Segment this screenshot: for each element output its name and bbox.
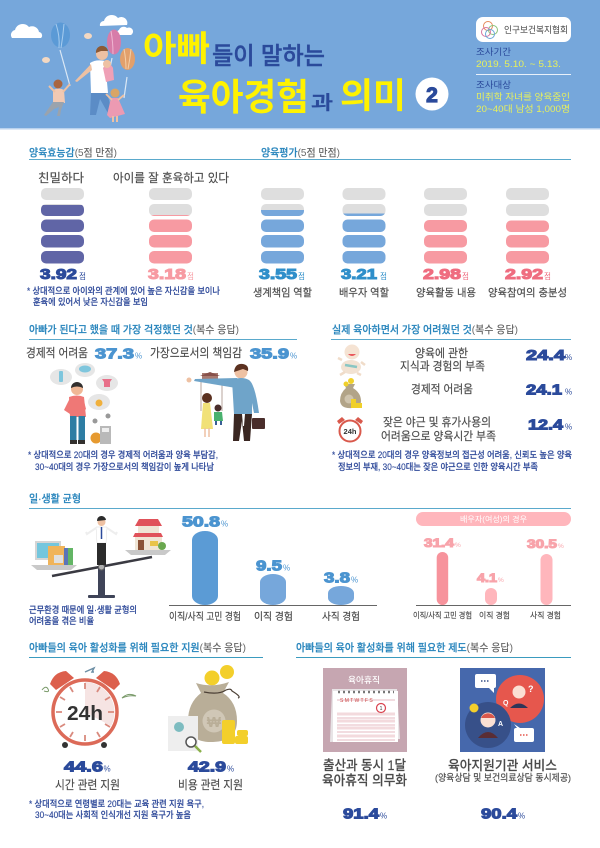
bar labels: 양육참여의 충분성 bbox=[488, 287, 567, 299]
value: 30.5% bbox=[527, 537, 564, 551]
note: support: 30~40대는 사회적 인식개선 지원 욕구가 높음 bbox=[35, 809, 191, 820]
value: 30.5%: 30.5 bbox=[527, 537, 557, 551]
stat: 91.4% bbox=[343, 806, 387, 822]
note: worries: * 상대적으로 20대의 경우 경제적 어려움과 양육 부담감, bbox=[28, 449, 218, 460]
survey info bbox=[476, 47, 571, 114]
row text: overtime: 잦은 야근 및 휴가사용의 bbox=[383, 416, 491, 429]
value: 9.5%: % bbox=[283, 564, 290, 572]
issue number badge bbox=[416, 78, 448, 110]
survey info: 조사기간 bbox=[476, 47, 511, 57]
note: efficacy bbox=[27, 285, 221, 307]
bar: activities 2.98 bbox=[424, 188, 467, 264]
value: 2.98: 2.98 bbox=[423, 266, 461, 283]
value: 2.98 bbox=[423, 266, 469, 283]
bar chart: fathers bbox=[169, 514, 377, 623]
value: 50.8%: 50.8 bbox=[182, 514, 220, 530]
heading: parenting evaluation: 양육평가(5점 만점) bbox=[261, 146, 340, 159]
pill label: spouse bbox=[416, 512, 571, 526]
note: support: * 상대적으로 연령별로 20대는 교육 관련 지원 욕구, bbox=[29, 798, 204, 809]
stat: head of household 35.9%: % bbox=[290, 352, 297, 360]
icon: money bag large: ₩ bbox=[207, 714, 222, 731]
stat: cost 42.9%: 42.9 bbox=[188, 758, 226, 776]
stat: 91.4%: % bbox=[380, 812, 387, 820]
value: 24.1%: 24.1 bbox=[526, 382, 562, 398]
row text: knowledge: 양육에 관한 bbox=[415, 347, 468, 360]
icon: alarm clock bbox=[337, 417, 363, 442]
heading: needed support: 아빠들의 육아 활성화를 위해 필요한 지원(복수 응답) bbox=[29, 641, 246, 654]
value: 3.8% bbox=[324, 570, 358, 586]
illustration: father with family bbox=[186, 364, 265, 441]
row text: economic: 경제적 어려움 bbox=[411, 382, 473, 396]
icon: consulting service: Q bbox=[503, 700, 509, 707]
axis labels: spouse bbox=[413, 610, 561, 620]
axis labels: fathers: 이직 경험 bbox=[254, 610, 293, 623]
panel: real difficulties bbox=[332, 323, 572, 472]
title: 아빠 bbox=[143, 30, 210, 69]
note: balance: 근무환경 때문에 일·생활 균형의 bbox=[29, 604, 137, 615]
bar: spouse 3.21 bbox=[342, 188, 386, 264]
panel: parenting evaluation bbox=[253, 146, 567, 299]
bar chart: spouse bbox=[413, 512, 571, 620]
heading: worries: 아빠가 된다고 했을 때 가장 걱정했던 것(복수 응답) bbox=[29, 323, 239, 336]
item label: discipline: 아이를 잘 훈육하고 있다 bbox=[113, 171, 229, 185]
value: 31.4%: % bbox=[455, 542, 461, 549]
value: 3.92 bbox=[40, 266, 86, 283]
stat: 90.4% bbox=[481, 806, 525, 822]
icon: parental leave calendar bbox=[323, 668, 407, 752]
row text: knowledge bbox=[400, 347, 485, 373]
note: support bbox=[29, 798, 204, 820]
value: 50.8% bbox=[182, 514, 228, 530]
note: worries bbox=[28, 449, 218, 472]
heading: work-life balance: 일·생활 균형 bbox=[29, 492, 81, 505]
text: support agency service: (양육상담 및 보건의료상담 동시제공) bbox=[435, 772, 571, 784]
value: 3.18: 점 bbox=[187, 271, 194, 281]
header banner bbox=[0, 0, 600, 130]
stat: head of household 35.9%: 35.9 bbox=[250, 346, 289, 362]
value: 4.1% bbox=[477, 571, 504, 585]
stat: economic difficulty 37.3%: 경제적 어려움 bbox=[26, 346, 88, 360]
axis labels: fathers: 이직/사직 고민 경험 bbox=[169, 610, 241, 623]
icon: consulting service: ? bbox=[528, 684, 534, 694]
illustration: balance scale bbox=[31, 516, 171, 598]
stat: time 44.6%: % bbox=[104, 764, 111, 774]
value: 4.1%: 4.1 bbox=[477, 571, 497, 585]
text: support agency service: 육아지원기관 서비스 bbox=[448, 758, 557, 773]
stat: economic difficulty 37.3% bbox=[26, 346, 142, 362]
note: efficacy: 훈육에 있어서 낮은 자신감을 보임 bbox=[33, 296, 148, 307]
labels: time and cost: 비용 관련 지원 bbox=[178, 778, 243, 792]
value: 3.92: 점 bbox=[79, 271, 86, 281]
value: 3.18 bbox=[148, 266, 194, 283]
stat: economic difficulty 37.3%: 37.3 bbox=[95, 346, 134, 362]
icon: consulting service bbox=[460, 668, 545, 752]
stat: economic difficulty 37.3%: % bbox=[135, 352, 142, 360]
bar labels: 배우자 역할 bbox=[339, 287, 389, 299]
value: 50.8%: % bbox=[221, 520, 228, 528]
icon: alarm clock large: 24h bbox=[67, 703, 103, 725]
panel: work-life balance bbox=[29, 492, 571, 626]
heading: difficulties: 실제 육아하면서 가장 어려웠던 것(복수 응답) bbox=[332, 323, 518, 336]
icon: alarm clock large bbox=[42, 668, 136, 748]
value: 3.55 bbox=[259, 266, 305, 283]
note: difficulties bbox=[332, 449, 572, 472]
organisation logo box: 인구보건복지협회 bbox=[504, 24, 568, 35]
value: 9.5%: 9.5 bbox=[256, 558, 282, 574]
stat: 91.4%: 91.4 bbox=[343, 806, 380, 822]
value: 24.1%: % bbox=[565, 388, 572, 396]
value: 2.92 bbox=[505, 266, 551, 283]
labels: time and cost: 시간 관련 지원 bbox=[55, 778, 120, 792]
stat: time 44.6%: 44.6 bbox=[64, 758, 103, 776]
stat: time 44.6% bbox=[64, 758, 111, 776]
title: 과 bbox=[311, 92, 333, 114]
bar labels bbox=[253, 286, 567, 299]
value: 3.55: 점 bbox=[298, 271, 305, 281]
bar labels: 양육활동 내용 bbox=[416, 286, 476, 299]
value: 24.4%: 24.4 bbox=[526, 347, 566, 364]
value: 31.4% bbox=[424, 536, 461, 550]
note: difficulties: 정보의 부재, 30~40대는 잦은 야근으로 인한 양육시간 부족 bbox=[338, 461, 538, 472]
value: 9.5% bbox=[256, 558, 290, 574]
text: paternity leave obligation: 출산과 동시 1달 bbox=[323, 758, 406, 773]
title: 육아경험 bbox=[178, 77, 309, 118]
title: 들이 말하는 bbox=[212, 43, 325, 70]
survey info: 미취학 자녀를 양육중인 bbox=[476, 92, 570, 102]
stat: 90.4%: % bbox=[518, 812, 525, 820]
value: 3.18: 3.18 bbox=[148, 266, 186, 283]
value: 3.8%: 3.8 bbox=[324, 570, 350, 586]
title: 의미 bbox=[340, 77, 406, 116]
value: 2.92: 2.92 bbox=[505, 266, 543, 283]
text: paternity leave obligation: 육아휴직 의무화 bbox=[322, 773, 408, 788]
value: 24.1% bbox=[526, 382, 572, 398]
value: 3.21: 3.21 bbox=[341, 266, 377, 283]
text: paternity leave obligation bbox=[322, 758, 408, 788]
row text: overtime bbox=[381, 416, 496, 443]
note: efficacy: * 상대적으로 아이와의 관계에 있어 높은 자신감을 보이나 bbox=[27, 285, 221, 296]
note: worries: 30~40대의 경우 가장으로서의 책임감이 높게 나타남 bbox=[35, 461, 214, 472]
value: 31.4%: 31.4 bbox=[424, 536, 454, 550]
icon: baby bbox=[338, 344, 365, 375]
stat: cost 42.9%: % bbox=[227, 764, 234, 774]
axis labels: spouse: 이직 경험 bbox=[479, 610, 510, 620]
survey info: 20~40대 남성 1,000명 bbox=[476, 104, 570, 114]
value: 24.4% bbox=[526, 347, 572, 364]
icon: parental leave calendar: S M T W T F S bbox=[340, 698, 373, 704]
note: balance bbox=[29, 604, 137, 626]
axis labels: fathers: 사직 경험 bbox=[322, 610, 360, 623]
note: balance: 어려움을 겪은 비율 bbox=[29, 615, 94, 626]
survey info: 조사대상 bbox=[476, 80, 511, 90]
value: 12.4% bbox=[528, 416, 572, 434]
item label: close: 친밀하다 bbox=[38, 171, 84, 185]
bar: close 3.92 bbox=[41, 188, 84, 264]
panel: worries before fatherhood bbox=[26, 323, 297, 472]
stat: head of household 35.9% bbox=[150, 345, 297, 362]
stat: cost 42.9% bbox=[188, 758, 234, 776]
value: 3.92: 3.92 bbox=[40, 266, 77, 283]
axis labels: spouse: 이직/사직 고민 경험 bbox=[413, 610, 472, 620]
survey info: 2019. 5.10. ~ 5.13. bbox=[476, 59, 561, 69]
heading: needed systems: 아빠들의 육아 활성화를 위해 필요한 제도(복수 응답) bbox=[296, 641, 513, 654]
value: 2.92: 점 bbox=[544, 271, 551, 281]
value: 3.21: 점 bbox=[380, 271, 387, 281]
icon: consulting service: A bbox=[498, 721, 503, 728]
value: 24.4%: % bbox=[565, 353, 572, 362]
illustration: worried man bbox=[50, 363, 118, 444]
row text: overtime: 어려움으로 양육시간 부족 bbox=[381, 430, 496, 443]
value: 2.98: 점 bbox=[462, 271, 469, 281]
labels: time and cost bbox=[55, 778, 243, 792]
axis labels: fathers bbox=[169, 610, 360, 623]
icon: parental leave calendar: 육아휴직 bbox=[348, 675, 380, 685]
panel: needed support bbox=[29, 641, 248, 820]
pill label: spouse: 배우자(여성)의 경우 bbox=[460, 514, 527, 524]
icon: money bag bbox=[340, 378, 362, 408]
title bbox=[143, 30, 406, 118]
icon: parental leave calendar: 1 bbox=[380, 706, 383, 712]
value: 3.21 bbox=[341, 266, 387, 283]
panel: needed systems bbox=[296, 641, 571, 822]
text: support agency service bbox=[435, 758, 571, 784]
issue number badge: 2 bbox=[426, 84, 438, 107]
bar: sufficiency 2.92 bbox=[506, 188, 549, 264]
value: 30.5%: % bbox=[558, 543, 564, 550]
icon: money bag large bbox=[168, 665, 248, 752]
value: 3.55: 3.55 bbox=[259, 266, 297, 283]
bar: breadwinner 3.55 bbox=[261, 188, 304, 264]
value: 3.8%: % bbox=[351, 576, 358, 584]
stat: 90.4%: 90.4 bbox=[481, 806, 518, 822]
bar labels: 생계책임 역할 bbox=[253, 286, 312, 299]
panel: parenting efficacy bbox=[27, 146, 229, 307]
axis labels: spouse: 사직 경험 bbox=[530, 610, 561, 620]
stat: head of household 35.9%: 가장으로서의 책임감 bbox=[150, 345, 242, 360]
note: difficulties: * 상대적으로 20대의 경우 양육정보의 접근성 어려움, 신뢰도 높은 양육 bbox=[332, 449, 572, 460]
value: 4.1%: % bbox=[498, 577, 504, 584]
illustration: family with balloons bbox=[11, 15, 135, 122]
row text: knowledge: 지식과 경험의 부족 bbox=[400, 359, 485, 373]
icon: alarm clock: 24h bbox=[344, 427, 357, 436]
value: 12.4%: % bbox=[565, 422, 572, 432]
organisation logo box bbox=[476, 17, 571, 42]
value: 12.4%: 12.4 bbox=[528, 416, 564, 434]
bar: discipline 3.18 bbox=[149, 188, 192, 264]
heading: parenting efficacy: 양육효능감(5점 만점) bbox=[29, 146, 117, 159]
